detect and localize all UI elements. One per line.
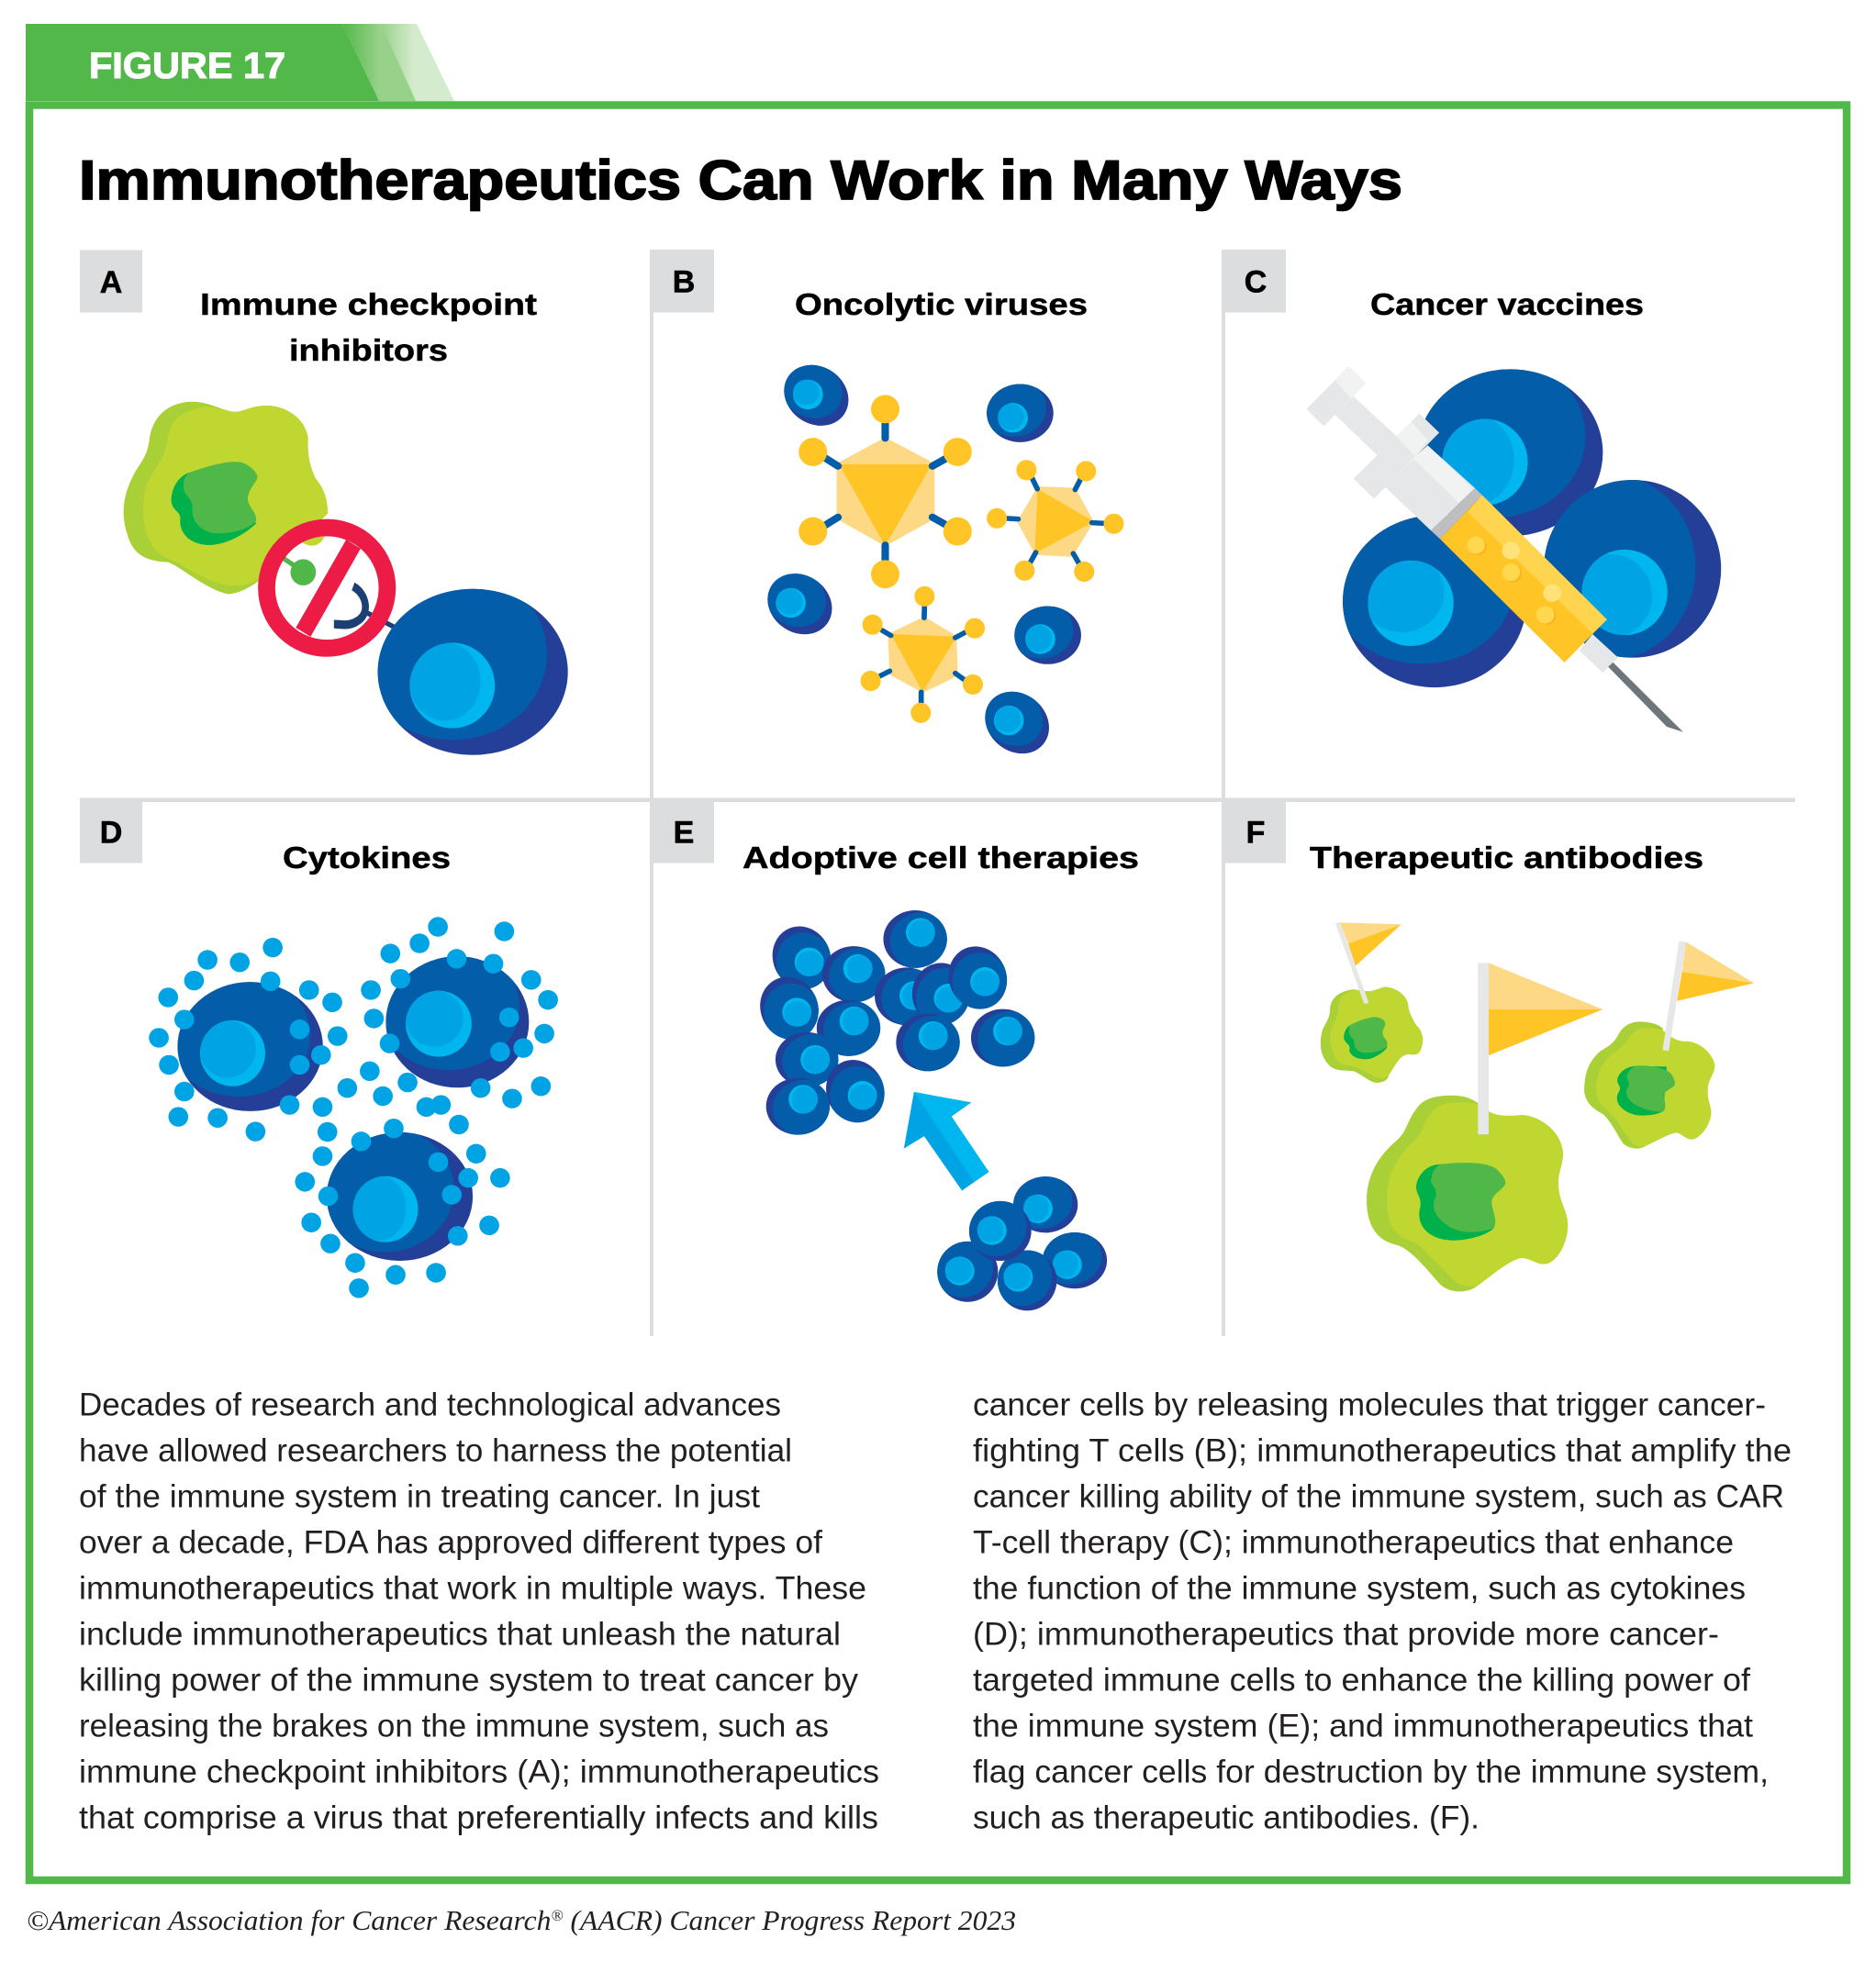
body text: right column: (D); immunotherapeutics that provide more cancer- [973, 1617, 1719, 1652]
body text: right column: fighting T cells (B); immunotherapeutics that amplify the [973, 1433, 1792, 1468]
illustration: checkpoint blocked [124, 402, 568, 755]
body text: left column: have allowed researchers to harness the potential [79, 1433, 792, 1468]
figure tab [26, 24, 454, 101]
panel E: adoptive cell therapies [650, 798, 1139, 1310]
title: Immunotherapeutics Can Work in Many Ways [79, 150, 1402, 211]
footer credit: (AACR) Cancer Progress Report 2023 [564, 1904, 1016, 1936]
panel A: immune checkpoint inhibitors [80, 250, 568, 755]
label box B: B [673, 264, 695, 299]
heading F: Therapeutic antibodies [1310, 841, 1703, 875]
label box F: F [1246, 815, 1265, 850]
figure tab: FIGURE 17 [89, 46, 285, 86]
body text: left column [79, 1387, 879, 1835]
arrow [904, 1092, 989, 1190]
illustration: cell clusters and arrow [753, 910, 1107, 1310]
label box D [80, 798, 142, 863]
footer credit: ©American Association for Cancer Research [27, 1904, 542, 1936]
panel B: oncolytic viruses [650, 250, 1123, 766]
heading A [200, 287, 537, 367]
label box C [1223, 250, 1286, 312]
body text: right column: T-cell therapy (C); immunotherapeutics that enhance [973, 1525, 1734, 1560]
body text: right column: such as therapeutic antibodies. (F). [973, 1800, 1480, 1835]
label box A: A [100, 265, 122, 300]
label box C: C [1245, 264, 1267, 299]
label box E: E [674, 815, 694, 850]
heading D: Cytokines [283, 841, 451, 875]
heading B: Oncolytic viruses [795, 287, 1088, 321]
body text: right column: the function of the immune system, such as cytokines [973, 1571, 1746, 1606]
body text: left column: that comprise a virus that preferentially infects and kills [79, 1800, 878, 1835]
heading E: Adoptive cell therapies [743, 841, 1139, 875]
body text: left column: of the immune system in treating cancer. In just [79, 1479, 760, 1514]
label box D: D [100, 815, 122, 850]
label box B [650, 250, 714, 312]
body text: left column: immunotherapeutics that work in multiple ways. These [79, 1571, 866, 1606]
body text: left column: immune checkpoint inhibitors (A); immunotherapeutics [79, 1755, 879, 1789]
label box A [80, 250, 142, 312]
heading A: Immune checkpoint [200, 287, 537, 321]
body text: right column: flag cancer cells for destruction by the immune system, [973, 1755, 1769, 1789]
label box F [1223, 798, 1286, 863]
illustration: cells releasing cytokines [149, 917, 558, 1298]
illustration: syringe over cells [1307, 355, 1721, 732]
body text: right column: targeted immune cells to enhance the killing power of [973, 1663, 1750, 1698]
body text: left column: include immunotherapeutics that unleash the natural [79, 1617, 841, 1652]
illustration: viruses and cells [767, 365, 1123, 754]
body text: right column: cancer killing ability of the immune system, such as CAR [973, 1479, 1784, 1514]
heading A: inhibitors [289, 333, 448, 367]
body text: left column: over a decade, FDA has approved different types of [79, 1525, 822, 1560]
panel C: cancer vaccines [1223, 250, 1721, 732]
panel D: cytokines [80, 798, 558, 1298]
footer credit: ® [551, 1907, 564, 1924]
body text: left column: releasing the brakes on the immune system, such as [79, 1709, 829, 1744]
grid dividers [80, 250, 1795, 1336]
heading C: Cancer vaccines [1370, 287, 1644, 321]
body text: right column [973, 1387, 1792, 1835]
body text: right column: cancer cells by releasing molecules that trigger cancer- [973, 1387, 1766, 1422]
body text: left column: killing power of the immune system to treat cancer by [79, 1663, 859, 1698]
body text: left column: Decades of research and technological advances [79, 1387, 781, 1422]
body text: right column: the immune system (E); and immunotherapeutics that [973, 1709, 1753, 1744]
illustration: flagged tumor cells [1321, 922, 1754, 1291]
label box E [650, 798, 714, 863]
panel F: therapeutic antibodies [1223, 798, 1754, 1291]
